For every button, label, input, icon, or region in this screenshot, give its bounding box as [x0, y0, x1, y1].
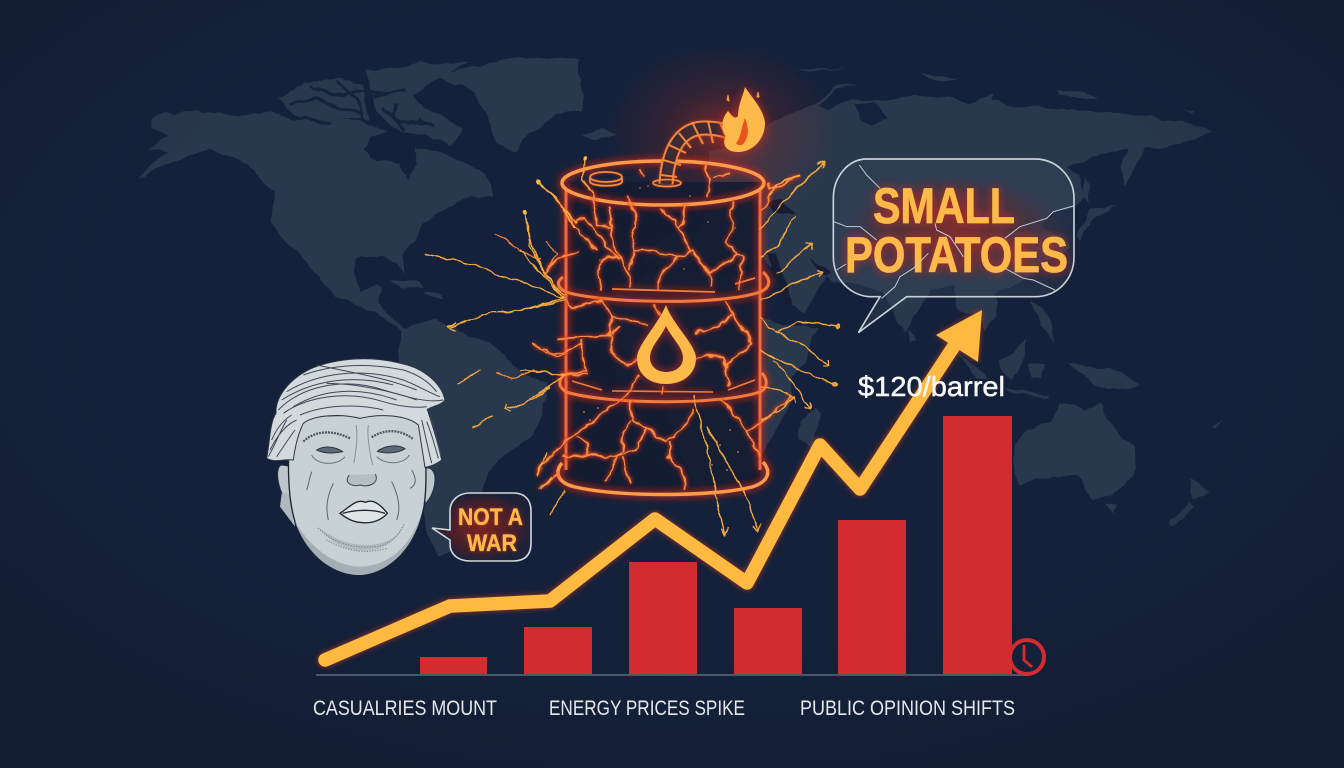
oil drop icon [637, 305, 696, 384]
barrel dark body [565, 182, 760, 494]
bubble cracks [834, 165, 1073, 298]
ears [278, 465, 293, 507]
label: energy: ENERGY PRICES SPIKE [549, 697, 745, 720]
bubble shape [833, 159, 1074, 333]
fuse [653, 121, 745, 186]
bar chart [316, 416, 1030, 675]
hair strands [268, 365, 443, 463]
stubble [318, 525, 403, 551]
barrel bung cap [590, 172, 622, 186]
mouth [340, 501, 387, 523]
barrel cracks [532, 165, 800, 488]
heat glow around fuse and barrel [607, 45, 837, 225]
map: Iceland [580, 126, 617, 139]
chart labels [313, 697, 1015, 720]
clock icon [1010, 640, 1044, 674]
map: Americas and Greenland [135, 58, 580, 557]
map: Arctic channels [287, 82, 433, 128]
oil barrel bomb [532, 87, 800, 494]
speech bubble: small potatoes: POTATOES [845, 227, 1068, 283]
map: Europe, Asia, Africa, Oceania [600, 68, 1222, 525]
face [288, 413, 426, 575]
crack end dots [523, 157, 587, 214]
rising price arrow [325, 310, 982, 660]
hair [267, 359, 445, 467]
hair back [280, 493, 295, 527]
barrel speckles [583, 185, 739, 471]
small bubble text: NOT A [458, 504, 523, 531]
speech bubble: not a war [432, 493, 531, 561]
cracks: east side [760, 162, 840, 420]
speech bubble: not a war: WAR [467, 530, 517, 557]
eyes and bags [312, 425, 409, 465]
map: inland seas [767, 100, 888, 303]
cracks: upper-left links [520, 159, 590, 400]
flame [722, 87, 765, 152]
label: opinion: PUBLIC OPINION SHIFTS [800, 697, 1015, 720]
speech bubble: small potatoes [833, 159, 1074, 333]
face shading [295, 513, 422, 575]
cracks: scattered west and south [457, 370, 761, 536]
world map [135, 58, 1222, 557]
small bubble shape [432, 493, 531, 561]
bar chart baseline [316, 674, 1030, 676]
brows [303, 431, 413, 442]
cracks: west side [426, 181, 577, 355]
barrel outline [558, 161, 769, 494]
bubble text: SMALL [873, 178, 1015, 234]
bars [420, 416, 1012, 674]
price label: $120/barrel [858, 371, 1005, 402]
lightning cracks radiating outward [426, 157, 840, 536]
label: casualties: CASUALRIES MOUNT [313, 697, 497, 720]
face creases [307, 470, 415, 520]
portrait [267, 359, 445, 575]
nose [347, 474, 376, 486]
